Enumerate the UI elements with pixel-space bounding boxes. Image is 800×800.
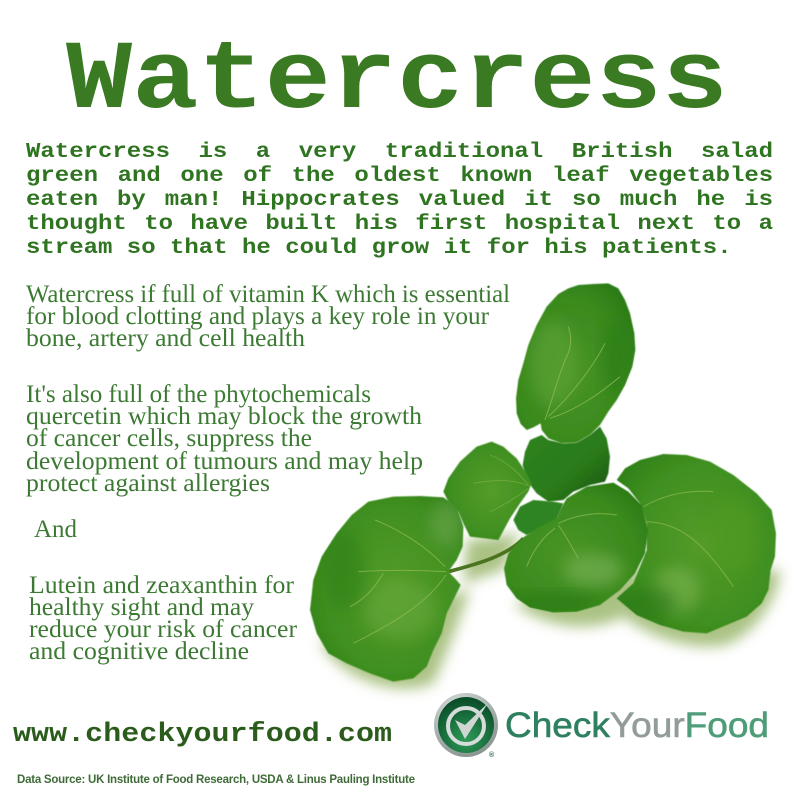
icon: check badge: [434, 693, 498, 757]
leaf: small centre: [513, 500, 563, 535]
intro text block: eaten by man! Hippocrates valued it so much he is: [26, 187, 773, 212]
image: watercress sprig: [310, 283, 780, 689]
text block: vitamin K: bone, artery and cell health: [26, 325, 306, 352]
text block: vitamin K: Watercress if full of vitamin K which is essential: [26, 281, 510, 308]
text block: quercetin: It's also full of the phytochemicals: [26, 381, 371, 408]
website url: www.checkyourfood.com: [13, 718, 392, 750]
stem: [448, 538, 523, 572]
data source: Data Source: UK Institute of Food Research, USDA & Linus Pauling Institute: [17, 774, 415, 786]
leaf: right large: [617, 454, 776, 633]
text block: vitamin K: [26, 281, 510, 352]
text: And: And: [34, 516, 77, 543]
leaf: left small: [443, 442, 532, 540]
text block: lutein: reduce your risk of cancer: [29, 616, 298, 643]
leaf shadows: [320, 533, 780, 689]
leaf: bottom left large: [310, 496, 463, 682]
text block: quercetin: [26, 381, 423, 497]
text block: quercetin: protect against allergies: [26, 470, 270, 497]
intro text block: Watercress is a very traditional British salad: [26, 139, 773, 164]
logo: CheckYourFood: ®: [489, 751, 495, 759]
title: Watercress: [66, 27, 728, 137]
intro text block: stream so that he could grow it for his patients.: [26, 235, 732, 260]
text block: lutein: Lutein and zeaxanthin for: [29, 572, 295, 599]
leaf: top: [516, 283, 635, 443]
text block: vitamin K: for blood clotting and plays a key role in your: [26, 303, 490, 330]
logo: CheckYourFood: [434, 693, 769, 759]
logo wordmark: CheckYourFood: [505, 706, 769, 745]
intro text block: thought to have built his first hospital next to a: [26, 211, 773, 236]
intro text block: green and one of the oldest known leaf vegetables: [26, 163, 773, 188]
leaf: front centre: [504, 483, 648, 613]
text block: lutein: healthy sight and may: [29, 594, 255, 621]
leaf: centre back: [523, 427, 610, 502]
text block: quercetin: quercetin which may block the growth: [26, 403, 423, 430]
text block: quercetin: of cancer cells, suppress the: [26, 425, 312, 452]
text block: quercetin: development of tumours and may help: [26, 448, 423, 475]
text block: lutein: and cognitive decline: [29, 638, 249, 665]
text block: lutein: [29, 572, 298, 665]
intro text block: [26, 139, 773, 260]
